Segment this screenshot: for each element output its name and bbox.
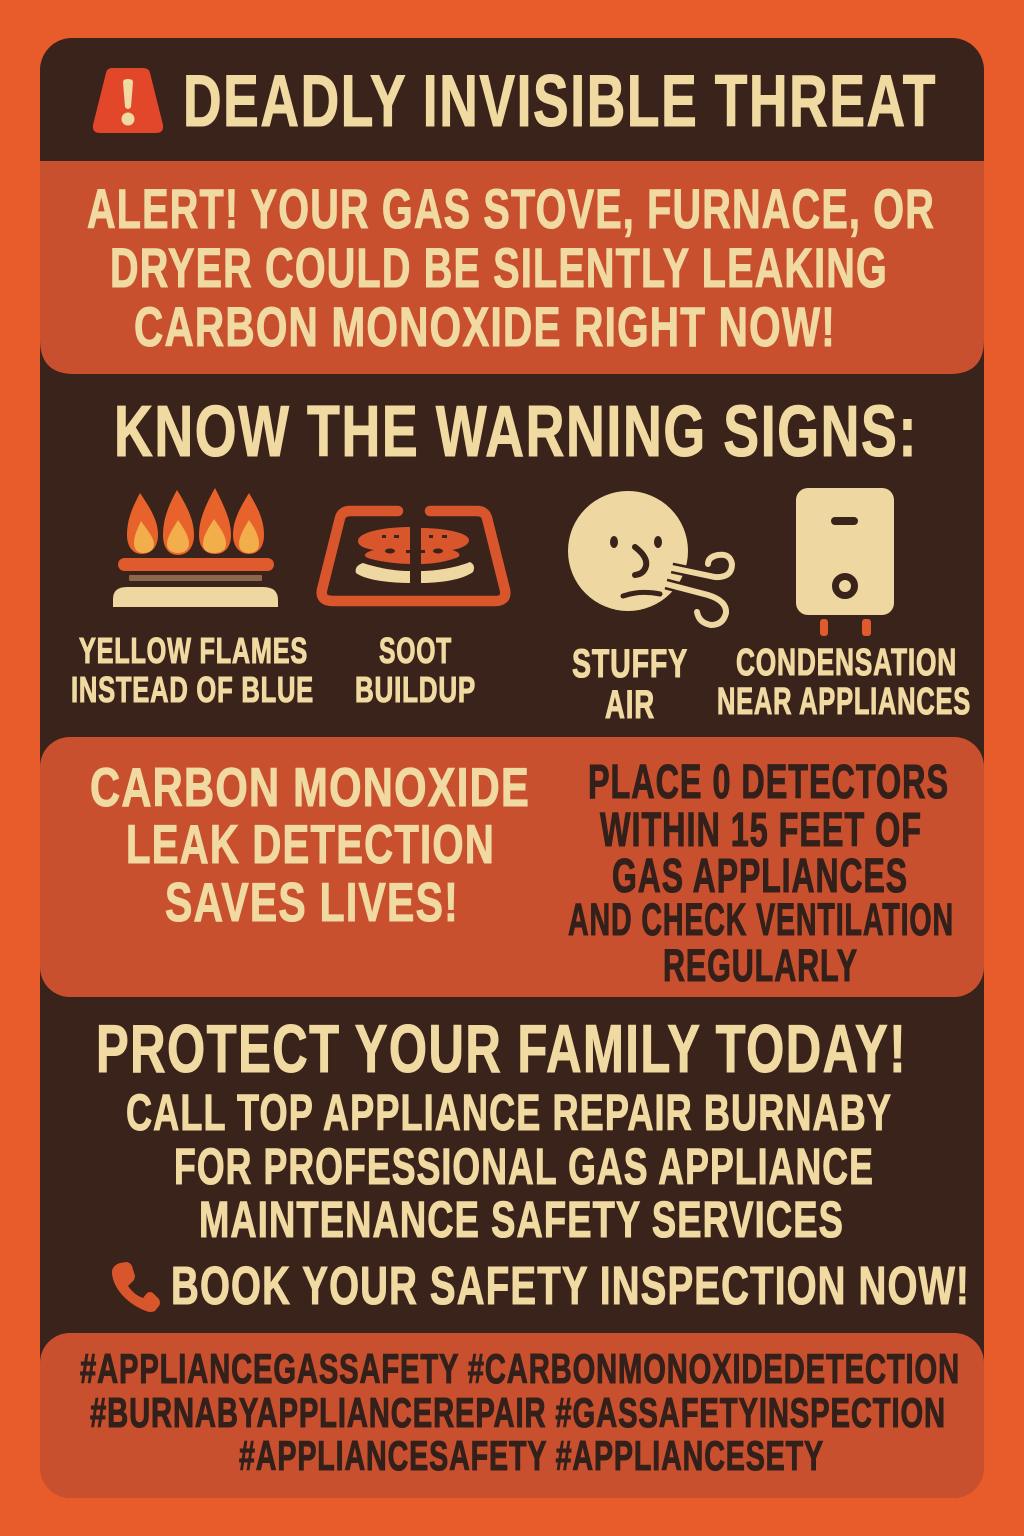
callout: detection saves lives	[90, 756, 530, 933]
icon: face with wind	[568, 491, 732, 625]
label: yellow flames	[71, 630, 314, 710]
text: detector placement	[568, 756, 954, 991]
label: yellow flames: INSTEAD OF BLUE	[71, 669, 314, 710]
warning sign: stuffy air	[568, 491, 732, 727]
panel: detection advice	[40, 737, 984, 997]
hashtags text	[80, 1345, 960, 1479]
booking line	[112, 1256, 970, 1316]
icon: gas water heater	[796, 488, 894, 636]
label: condensation	[717, 642, 971, 723]
callout: detection saves lives: LEAK DETECTION	[126, 813, 495, 875]
panel: title header	[93, 61, 937, 142]
text: call to action	[126, 1084, 892, 1248]
text: detector placement: REGULARLY	[663, 940, 858, 991]
icon: burner with soot	[322, 511, 505, 601]
icon: phone	[112, 1262, 160, 1312]
label: stuffy air: AIR	[605, 683, 655, 727]
callout: detection saves lives: CARBON MONOXIDE	[90, 756, 530, 818]
label: yellow flames: YELLOW FLAMES	[79, 630, 308, 671]
label: soot buildup: SOOT	[379, 630, 452, 671]
label: soot buildup: BUILDUP	[355, 669, 476, 710]
icon: gas burner flames	[113, 488, 278, 607]
label: stuffy air	[572, 642, 688, 727]
panel: hashtags	[40, 1333, 984, 1498]
warning sign: condensation	[717, 488, 971, 723]
callout: detection saves lives: SAVES LIVES!	[165, 871, 459, 933]
warning sign: yellow flames	[71, 488, 314, 710]
warning sign: soot buildup	[322, 511, 505, 710]
panel: alert banner	[40, 161, 984, 374]
icon: red warning sign	[93, 68, 163, 133]
alert text	[87, 177, 935, 358]
label: soot buildup	[355, 630, 476, 710]
label: stuffy air: STUFFY	[572, 642, 688, 686]
